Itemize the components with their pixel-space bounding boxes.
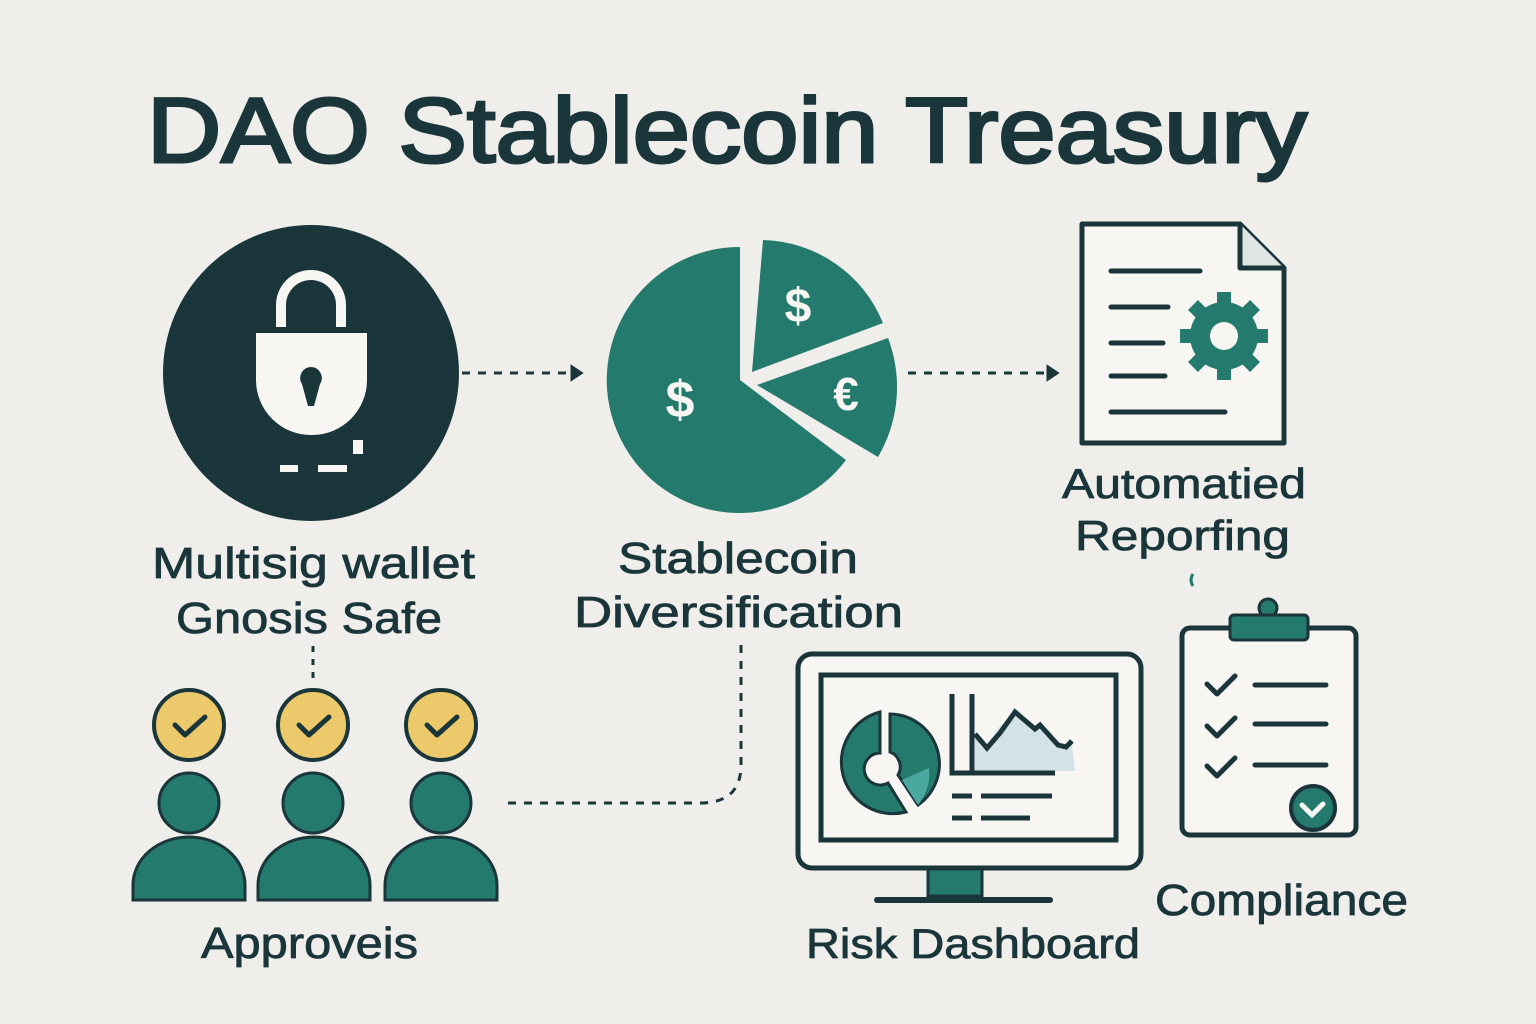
label: approvers: Approveis: [201, 919, 418, 968]
connector: diversification to approvers: [505, 645, 741, 803]
label: automated reporting: Reporfing: [1075, 512, 1290, 559]
title: DAO Stablecoin Treasury: [147, 80, 1307, 182]
label: automated reporting: Automatied: [1062, 460, 1306, 507]
label: automated reporting: [1062, 460, 1306, 586]
label: compliance: Compliance: [1155, 876, 1408, 925]
label: stablecoin diversification: Stablecoin: [618, 534, 858, 583]
icon: multisig lock: [163, 225, 459, 521]
label: multisig wallet: Multisig wallet: [152, 539, 475, 588]
icon: stablecoin pie: €: [833, 368, 859, 420]
icon: stablecoin pie: $: [785, 280, 812, 333]
connector: wallet to approvers: [312, 646, 314, 682]
label: stablecoin diversification: [574, 534, 903, 637]
label: stablecoin diversification: Diversification: [574, 588, 903, 637]
icon: approvers: [133, 690, 497, 900]
arrow: pie to report: [908, 367, 1057, 379]
icon: stablecoin pie: [607, 240, 897, 513]
arrow: lock to pie: [462, 367, 581, 379]
label: multisig wallet: Gnosis Safe: [176, 594, 442, 643]
icon: stablecoin pie: $: [666, 371, 695, 429]
label: multisig wallet: [152, 539, 475, 643]
icon: risk dashboard monitor: [798, 654, 1141, 900]
label: risk dashboard: Risk Dashboard: [806, 920, 1140, 967]
icon: compliance clipboard: [1182, 599, 1356, 835]
icon: report document: [1082, 224, 1284, 443]
